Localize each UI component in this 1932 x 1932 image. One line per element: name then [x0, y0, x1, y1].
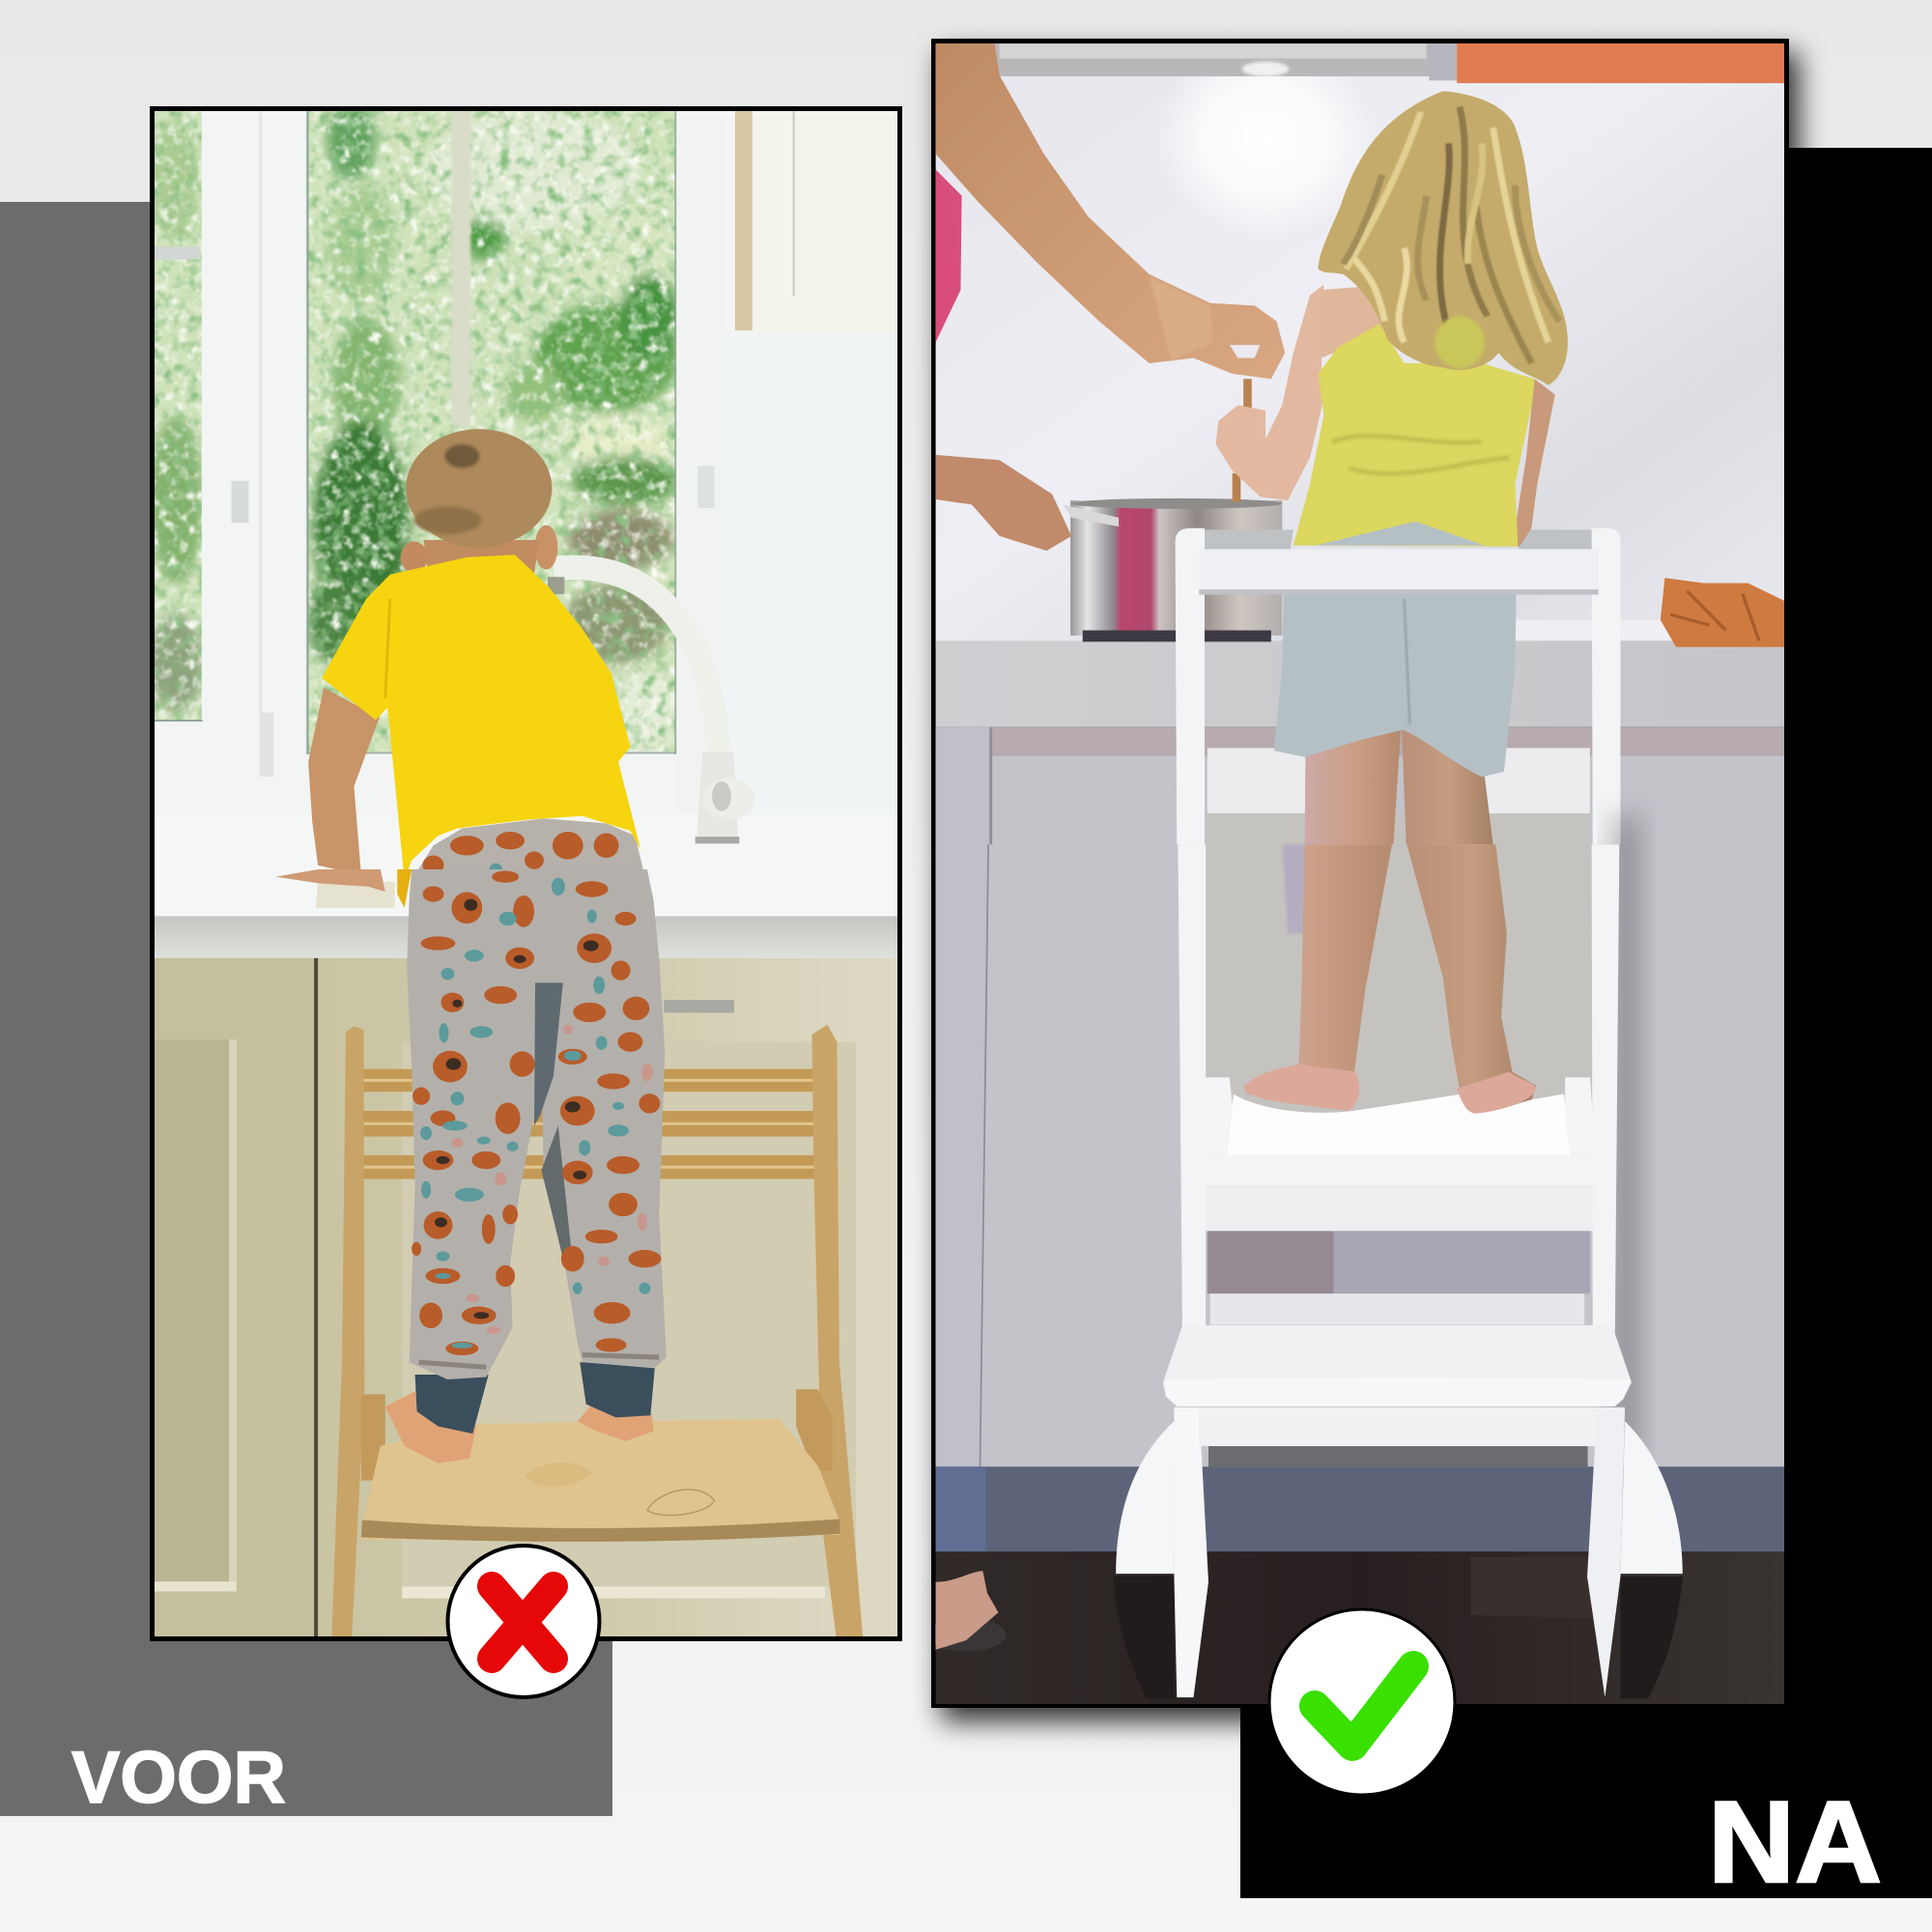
- blonde hair: [1319, 91, 1568, 385]
- pot: [1064, 498, 1282, 641]
- lower kitchen: cabinets, floor and tower steps: [926, 817, 1787, 1707]
- tower lower step: [1163, 1325, 1632, 1446]
- mother's lower hand: [936, 455, 1071, 551]
- boy's head: [401, 429, 557, 580]
- label: na: NA: [1708, 1777, 1882, 1907]
- feet: [385, 1389, 653, 1463]
- faucet: [548, 567, 755, 843]
- countertop and cabinets: [936, 620, 1787, 861]
- skirting: [936, 1466, 1787, 1555]
- window view: foliage: [155, 111, 676, 752]
- tower upper step: [1203, 1064, 1596, 1231]
- patterned pants: [397, 869, 667, 1379]
- dark floor: [936, 1551, 1787, 1707]
- boy's pants waist: [418, 818, 643, 869]
- right photo frame with shadow: [931, 39, 1789, 1708]
- grey shorts: [1274, 522, 1517, 777]
- icon: green check badge: [1269, 1609, 1455, 1795]
- adult foot and sandal: [926, 1571, 1007, 1651]
- cabinet doors: [150, 958, 316, 1643]
- upper kitchen: wall, mother, pot and girl: [936, 39, 1790, 866]
- towel: [1661, 578, 1786, 647]
- lower kitchen: cabinets, stool and legs: [150, 869, 904, 1643]
- label: voor: VOOR: [71, 1737, 286, 1819]
- girl's back and right arm: [1321, 285, 1555, 547]
- top cabinet strip: [995, 43, 1784, 83]
- yellow top: [1293, 324, 1535, 547]
- tower cast shadow: [1615, 817, 1637, 1455]
- spoon: [1233, 379, 1252, 502]
- pattern on waist: [423, 832, 619, 869]
- black panel: na: [1240, 148, 1932, 1898]
- wall light glow: [1179, 76, 1350, 213]
- tower inner back: [1205, 844, 1593, 1160]
- photo: boy on wooden stool: [145, 101, 904, 1643]
- girl's arm and hand: [1215, 285, 1323, 500]
- tower back panels and girl's thighs: [1208, 720, 1590, 866]
- tower top rail and uprights: [1176, 528, 1621, 861]
- tower posts and lower side arcs: [1113, 844, 1683, 1698]
- icon: red cross badge: [448, 1546, 599, 1697]
- wooden stool: [331, 1025, 864, 1643]
- left photo frame: [153, 108, 900, 1638]
- photo: girl on white learning tower: [926, 39, 1790, 1707]
- mother's arm and hand: [936, 39, 1285, 379]
- navy cuffs: [415, 1362, 655, 1434]
- gap behind tower: [1208, 1231, 1590, 1324]
- grey panel: voor: [0, 202, 612, 1816]
- upper kitchen: window, cabinet and faucet: [155, 111, 795, 869]
- counter: [150, 869, 904, 917]
- yellow shirt: [322, 554, 640, 880]
- girl's legs: [1243, 844, 1536, 1114]
- boy's hand: [275, 869, 385, 892]
- boy's arm: [308, 688, 380, 875]
